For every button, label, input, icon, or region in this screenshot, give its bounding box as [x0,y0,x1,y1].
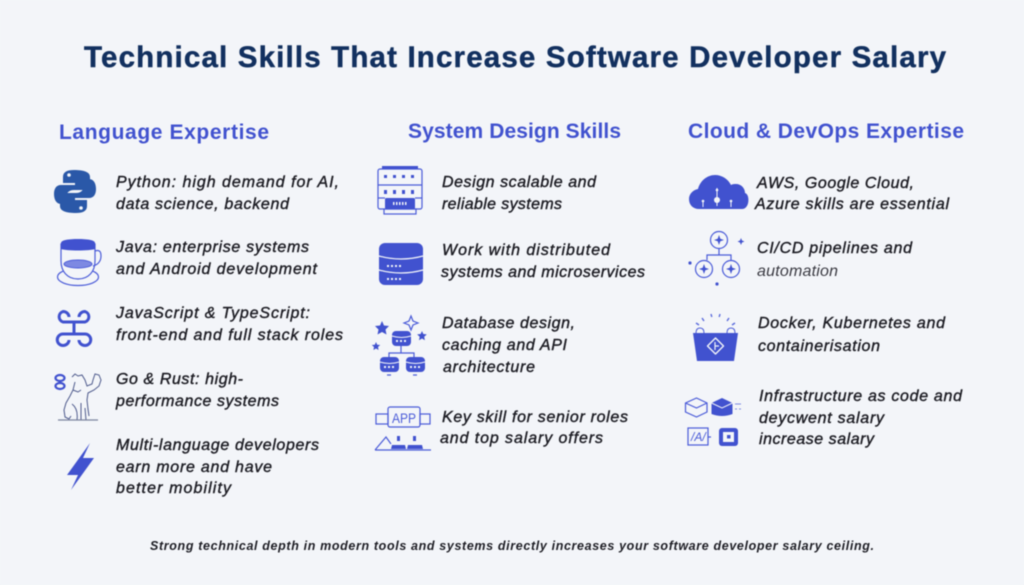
icon: server rack [378,166,422,214]
text: infrastructure: deycwent salary [759,410,885,427]
text: go and rust: Go & Rust: high- [116,371,243,388]
text: senior roles: Key skill for senior roles [442,409,628,426]
text: distributed [441,242,645,281]
text: java [115,239,318,278]
text: go and rust: performance systems [115,393,279,410]
text: database: architecture [443,359,535,376]
text: python [116,174,339,213]
text: docker: Docker, Kubernetes and [758,315,946,332]
icon: app [375,407,431,450]
footer note: Strong technical depth in modern tools and systems directly increases your software developer salary ceiling. [150,539,874,553]
panel: language expertise [54,121,343,497]
text: infrastructure [759,388,963,448]
text: python: data science, backend [116,196,290,213]
text: database [442,315,575,376]
icon: java cup [58,239,101,286]
icon: javascript command symbol [57,312,91,346]
text: infrastructure: increase salary [759,431,875,448]
text: javascript: JavaScript & TypeScript: [115,305,310,322]
text: distributed: systems and microservices [441,264,645,281]
icon: lightning bolt [67,443,94,490]
text: cloud: AWS, Google Cloud, [756,175,914,192]
text: ci/cd [757,240,913,280]
heading: system design skills: System Design Skills [408,120,621,143]
icon: docker container [693,314,738,361]
text: java: Java: enterprise systems [115,239,309,256]
text: docker [758,315,946,355]
text: multi-language: better mobility [116,480,232,497]
text: go and rust [115,371,279,410]
text: multi-language: Multi-language developers [116,437,319,454]
icon: infrastructure [686,398,741,446]
text: database: Database design, [442,315,575,332]
text: multi-language [116,437,319,497]
text: scalable: reliable systems [442,196,562,213]
text: infrastructure: Infrastructure as code and [759,388,963,405]
text: multi-language: earn more and have [116,459,272,476]
title: Technical Skills That Increase Software Developer Salary [84,41,947,74]
text: ci/cd: automation [757,263,838,280]
heading: cloud and devops expertise: Cloud & DevOps Expertise [688,120,964,143]
text: distributed: Work with distributed [442,242,611,259]
text: java: and Android development [116,261,318,278]
text: ci/cd: CI/CD pipelines and [757,240,913,257]
text: python: Python: high demand for AI, [116,174,339,191]
heading: language expertise: Language Expertise [59,121,269,144]
text: javascript [115,305,343,344]
icon: cloud [689,175,748,209]
text: scalable: Design scalable and [442,174,597,191]
panel: system design skills [372,120,645,450]
panel: cloud and devops expertise [686,120,964,448]
text: cloud: Azure skills are essential [754,196,949,213]
icon: infrastructure: /A/ [690,430,707,444]
icon: database stack [379,243,423,285]
text: senior roles: and top salary offers [440,430,603,447]
icon: python [54,170,96,213]
text: docker: containerisation [758,338,880,355]
text: senior roles [440,409,628,447]
icon: database tree [372,316,427,375]
icon: go and rust mascot [56,374,101,420]
text: javascript: front-end and full stack roles [116,327,343,344]
icon: app: APP [392,410,416,426]
text: scalable [442,174,597,213]
text: cloud [754,175,949,213]
text: database: caching and API [442,337,568,354]
icon: ci/cd tree [688,232,744,286]
